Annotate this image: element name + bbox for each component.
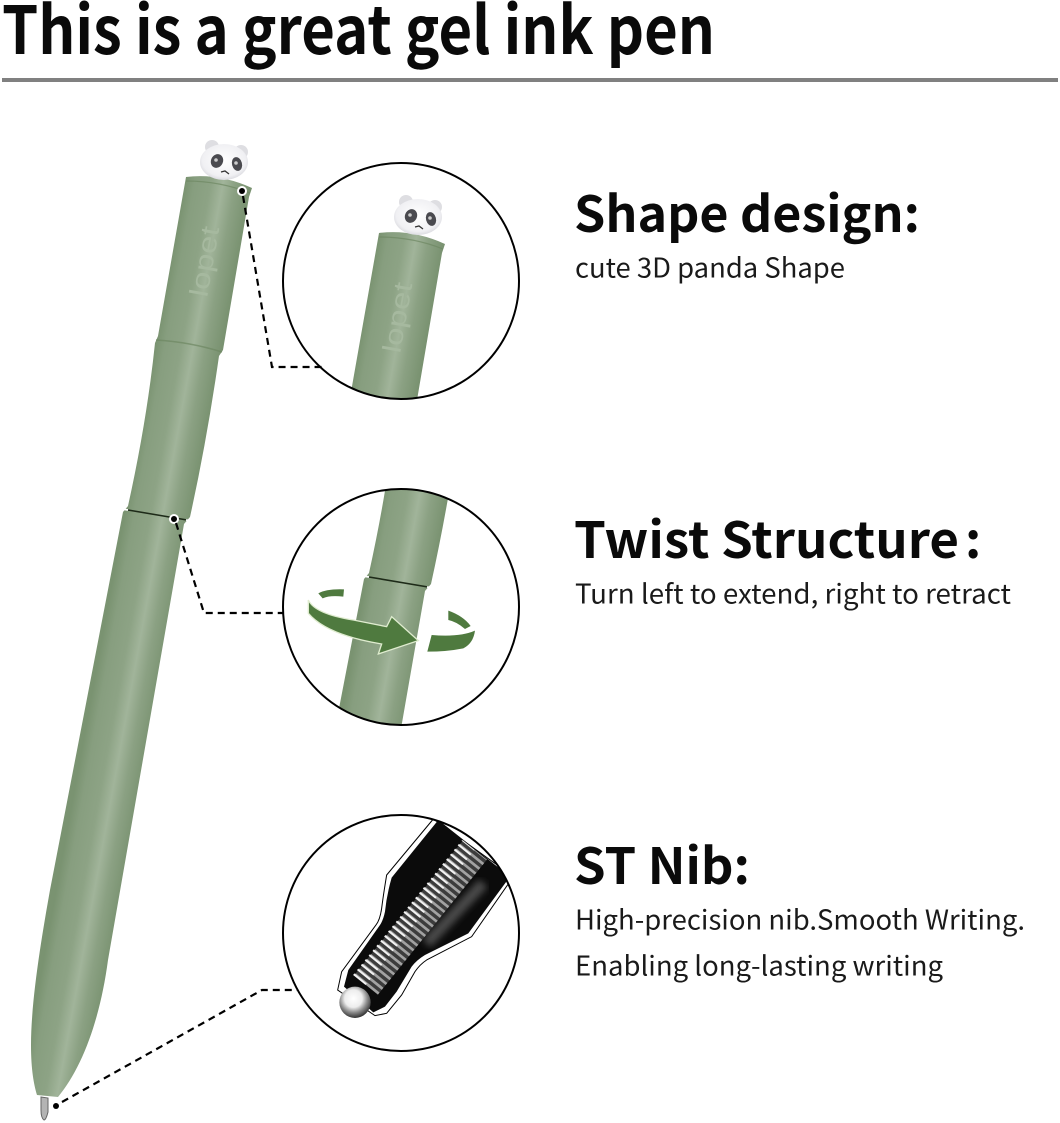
nib body bbox=[344, 820, 510, 1012]
pen nib tip bbox=[41, 1097, 48, 1120]
icon: twist arrow bbox=[308, 589, 475, 654]
leader: nib bbox=[53, 990, 297, 1109]
text: shape design description: cute 3D panda Shape bbox=[575, 246, 845, 286]
pen logo: lopet bbox=[183, 223, 225, 299]
leader: shape design bbox=[237, 186, 322, 367]
heading: shape design: Shape design: bbox=[574, 175, 920, 247]
nib ball bbox=[339, 987, 371, 1018]
panel: shape design circle bbox=[282, 162, 520, 400]
panel: nib circle bbox=[283, 815, 519, 1051]
panel: shape design circle: lopet bbox=[376, 279, 418, 355]
nib outline bbox=[338, 819, 513, 1016]
text: twist description: Turn left to extend, right to retract bbox=[575, 572, 1011, 612]
full pen bbox=[31, 140, 252, 1120]
pen barrel bbox=[31, 176, 252, 1097]
title rule bbox=[2, 78, 1058, 82]
heading: twist structure: : bbox=[965, 501, 981, 573]
text: nib description line 2: Enabling long-lasting writing bbox=[575, 944, 943, 984]
nib spring bbox=[366, 850, 475, 985]
text: nib description line 1: High-precision nib.Smooth Writing. bbox=[575, 898, 1025, 938]
heading: st nib: ST Nib: bbox=[574, 827, 750, 899]
panda cap bbox=[200, 140, 248, 180]
leader: twist structure bbox=[169, 514, 283, 613]
panel: twist structure circle bbox=[282, 488, 520, 726]
heading: twist structure: Twist Structure bbox=[574, 501, 959, 573]
